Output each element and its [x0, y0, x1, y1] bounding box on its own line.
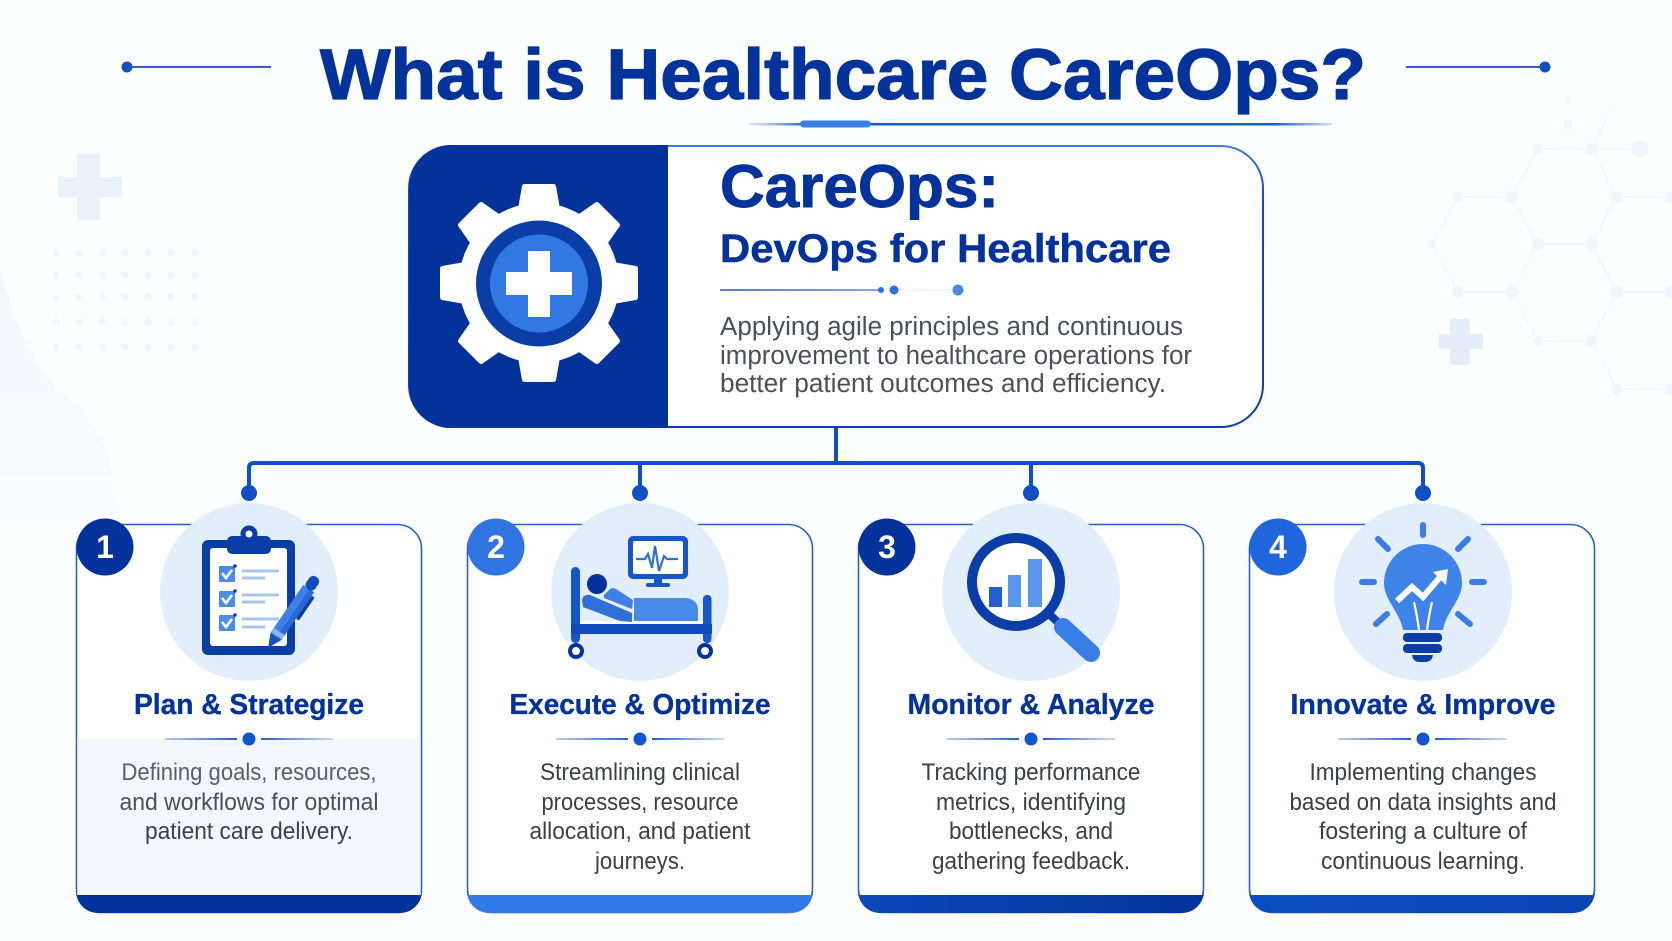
- card 2 text: Streamlining clinical: [540, 759, 740, 786]
- card 2 text: processes, resource: [542, 789, 738, 816]
- panel description: improvement to healthcare operations for: [720, 342, 1193, 370]
- card 1 text: patient care delivery.: [145, 818, 353, 845]
- panel: step 2 Execute & Optimize: [467, 503, 813, 913]
- decorative hexagon network: [1428, 100, 1672, 394]
- background blob: [0, 272, 117, 560]
- card 4 divider: [1338, 732, 1507, 746]
- card 1 divider: [165, 732, 333, 746]
- badge 1: 1: [96, 529, 114, 565]
- panel subheading: DevOps for Healthcare: [720, 227, 1171, 271]
- icon: clipboard and pen: [202, 526, 325, 655]
- card 4 text: fostering a culture of: [1319, 818, 1527, 845]
- gear icon tile: [409, 145, 668, 428]
- badge 1: [76, 518, 134, 576]
- card 2 heading: Execute & Optimize: [510, 689, 770, 721]
- panel: step 3 Monitor & Analyze: [858, 503, 1204, 913]
- badge 3: 3: [878, 529, 896, 565]
- badge 2: 2: [487, 529, 505, 565]
- badge 4: [1250, 518, 1306, 576]
- badge 2: [468, 518, 524, 576]
- panel: step 4 Innovate & Improve: [1249, 503, 1595, 913]
- title underline: [749, 120, 1332, 128]
- card 1 heading: Plan & Strategize: [134, 689, 364, 721]
- decorative dot grid: [52, 249, 199, 351]
- card 3 text: [922, 759, 1140, 875]
- card 2 text: journeys.: [594, 848, 685, 875]
- card 1 text: and workflows for optimal: [120, 789, 378, 816]
- panel heading: CareOps:: [720, 153, 999, 220]
- card 3 text: metrics, identifying: [936, 789, 1126, 816]
- panel description: [720, 313, 1193, 398]
- card 3 text: gathering feedback.: [932, 848, 1130, 875]
- connector lines: [241, 427, 1431, 501]
- card 1 text: [120, 759, 378, 845]
- panel: CareOps definition: [409, 145, 1263, 428]
- badge 3: [858, 518, 916, 576]
- panel: step 1 Plan & Strategize: [76, 503, 422, 913]
- card 2 text: [530, 759, 751, 875]
- card 3 heading: Monitor & Analyze: [908, 689, 1154, 721]
- card 4 text: Implementing changes: [1310, 759, 1536, 786]
- icon: light bulb with growth arrow: [1362, 525, 1484, 662]
- card 4 text: [1290, 759, 1556, 875]
- icon: patient bed with monitor: [570, 536, 712, 657]
- decorative plus right: [1439, 319, 1483, 365]
- badge 4: 4: [1269, 529, 1287, 565]
- card 4 text: based on data insights and: [1290, 789, 1556, 816]
- card 3 text: bottlenecks, and: [949, 818, 1113, 845]
- card 2 text: allocation, and patient: [530, 818, 751, 845]
- panel description: better patient outcomes and efficiency.: [720, 370, 1166, 398]
- card 4 heading: Innovate & Improve: [1290, 689, 1556, 721]
- title: What is Healthcare CareOps?: [320, 36, 1366, 115]
- card 4 text: continuous learning.: [1321, 848, 1525, 875]
- card 3 text: Tracking performance: [922, 759, 1140, 786]
- title decoration right: [1406, 62, 1550, 72]
- icon: magnifier with bar chart: [972, 538, 1091, 653]
- title decoration left: [122, 62, 271, 72]
- card 3 divider: [947, 732, 1115, 746]
- card 2 divider: [556, 732, 724, 746]
- card 1 text: Defining goals, resources,: [122, 759, 376, 786]
- panel divider: [720, 284, 964, 296]
- panel description: Applying agile principles and continuous: [720, 313, 1183, 341]
- decorative plus left: [58, 154, 122, 220]
